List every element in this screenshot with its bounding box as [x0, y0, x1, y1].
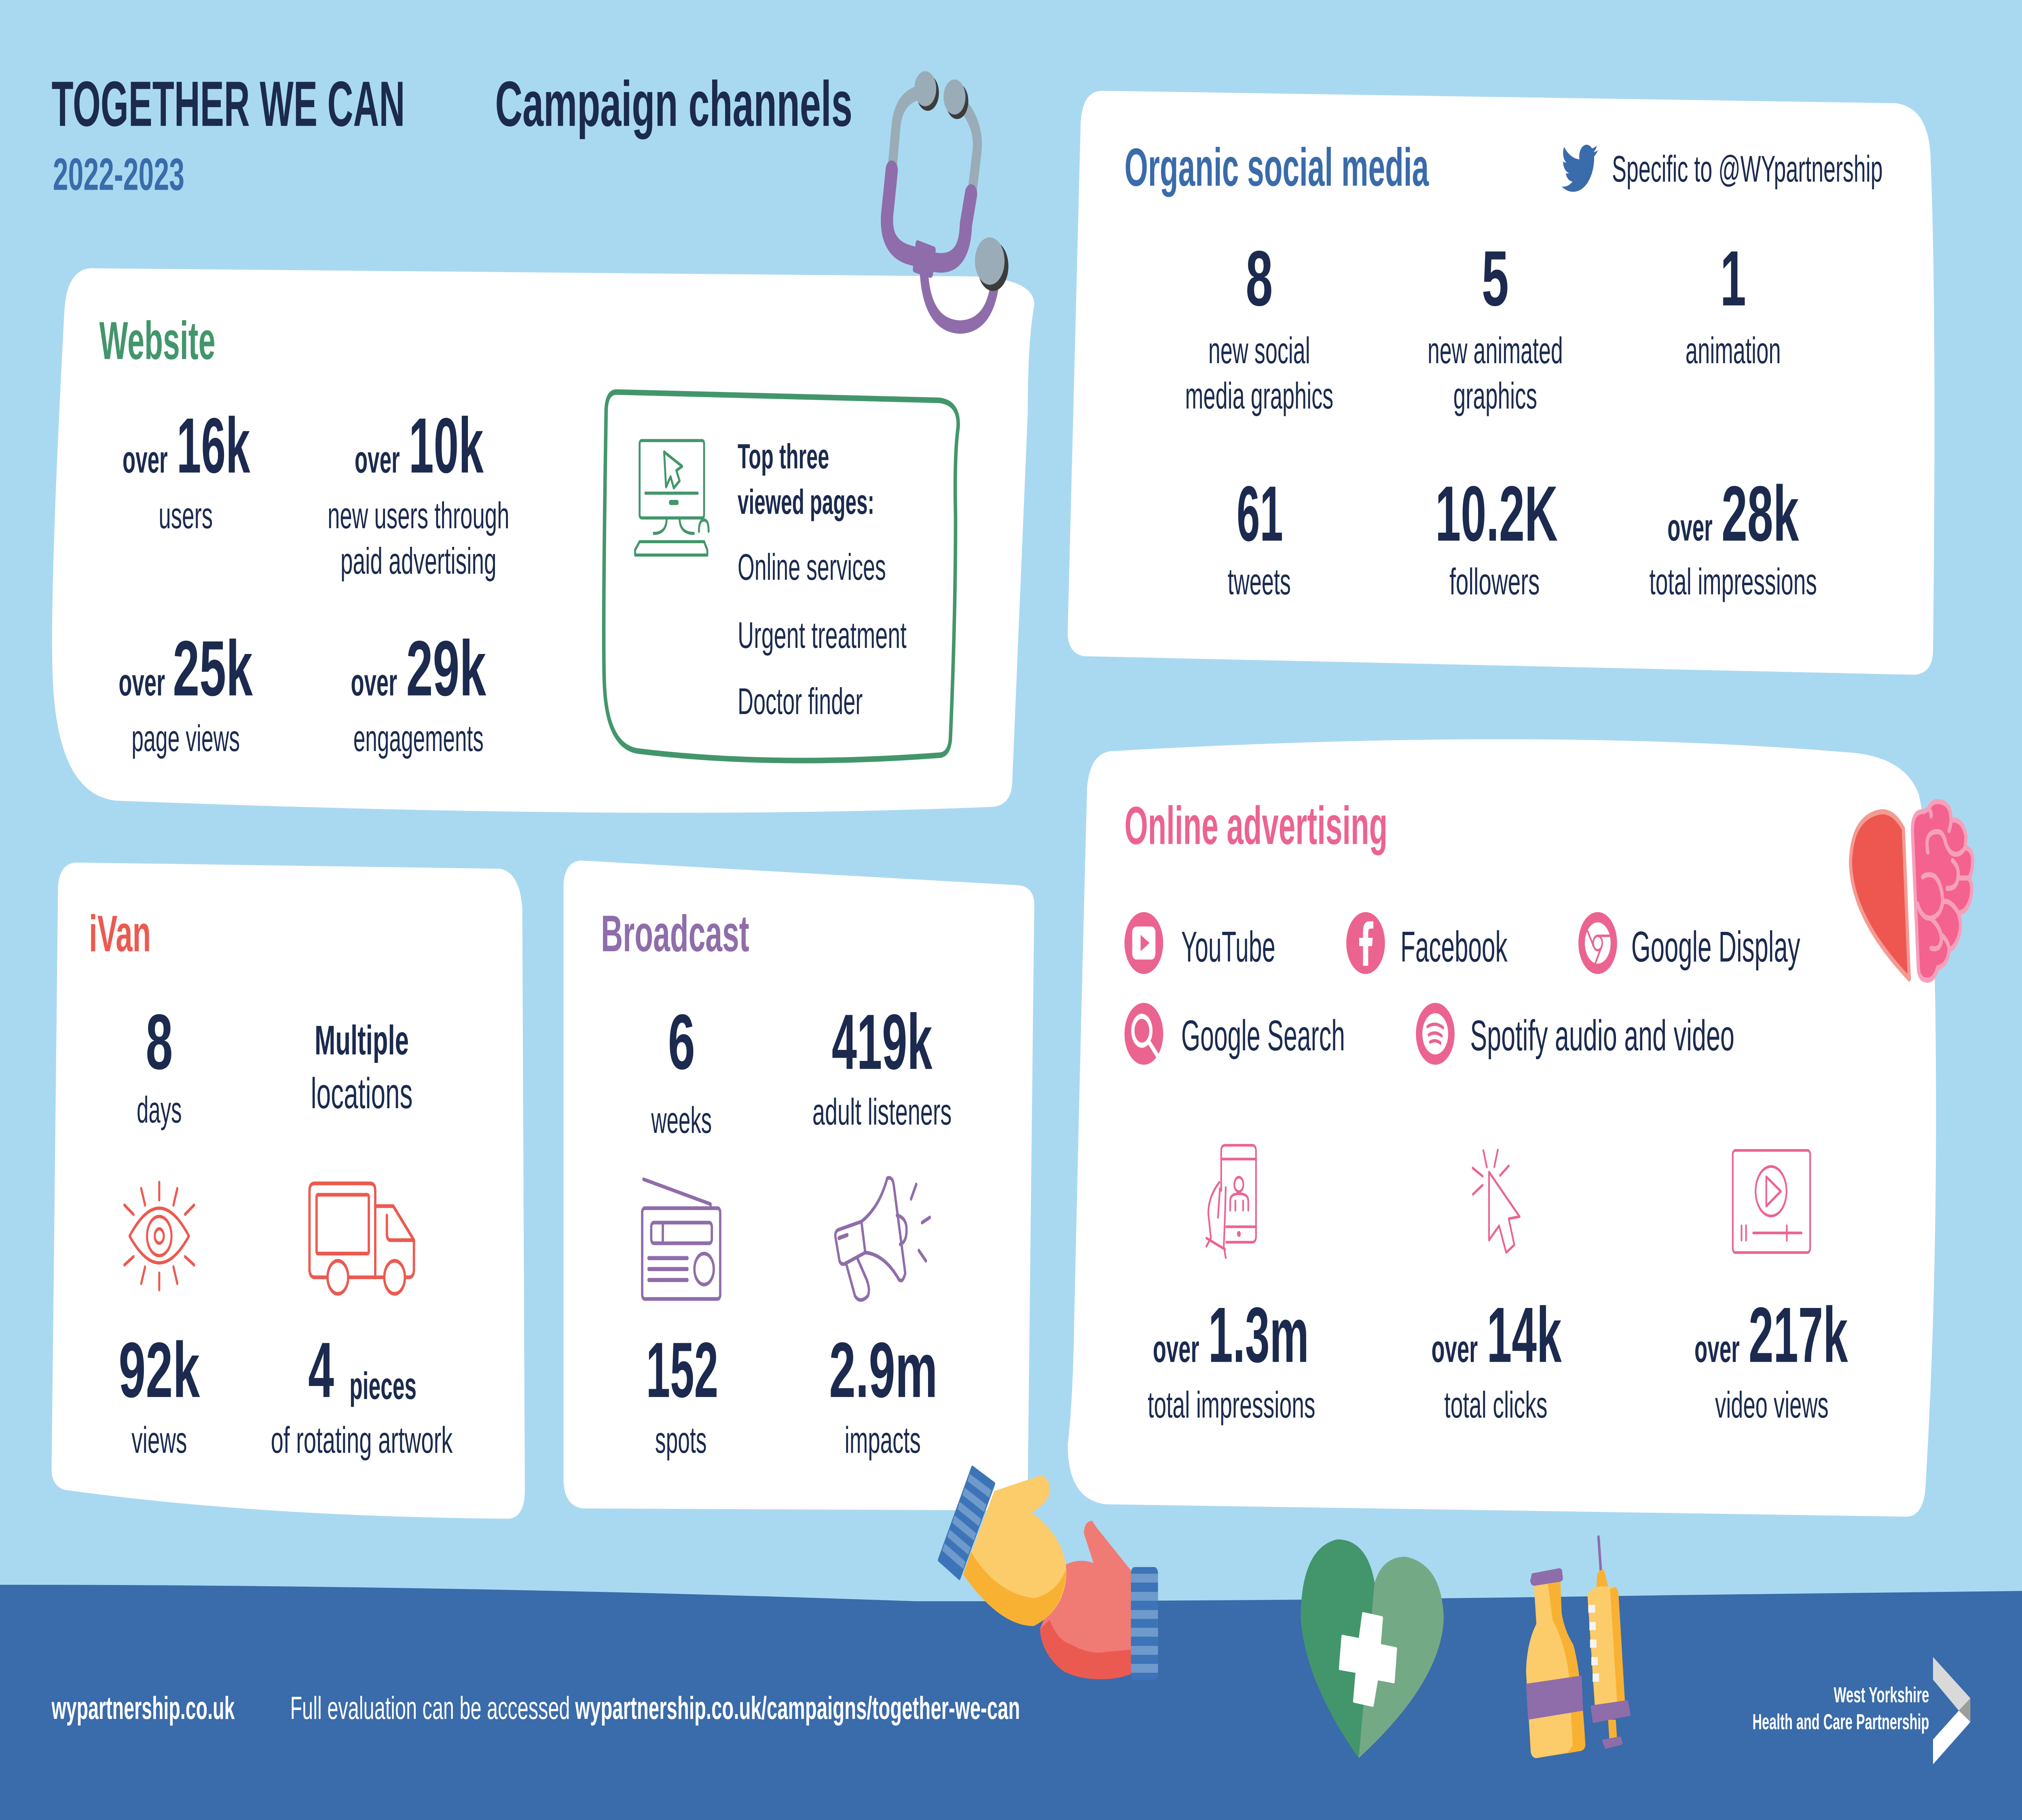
text: evaluation note: Full evaluation can be accessed — [290, 1690, 570, 1726]
stat: animation — [1686, 235, 1781, 371]
stat: listeners — [812, 999, 952, 1133]
stat: page views: over — [118, 661, 165, 704]
panel: organic social media — [1068, 91, 1935, 675]
heading: online advertising: Online advertising — [1125, 796, 1387, 856]
icon: twitter bird — [1562, 145, 1598, 192]
heading: broadcast: Broadcast — [601, 905, 749, 963]
text: twitter handle: Specific to @WYpartnership — [1612, 148, 1883, 190]
text: top three list: viewed pages: — [738, 483, 874, 522]
stat: social graphics: 8 — [1246, 235, 1273, 322]
stat: tweets: tweets — [1228, 561, 1291, 603]
stat: impacts — [829, 1327, 937, 1461]
stat: views: views — [131, 1420, 187, 1461]
channel: Google Display: Google Display — [1631, 922, 1800, 971]
icon: computer — [635, 440, 709, 555]
channel: YouTube — [1125, 912, 1275, 974]
stat: animation: animation — [1686, 330, 1781, 371]
stat: locations: Multiple — [315, 1018, 409, 1064]
stat: days: 8 — [146, 999, 173, 1086]
panel: broadcast — [563, 861, 1034, 1511]
stat: spots: 152 — [646, 1327, 718, 1414]
stat: new users — [328, 402, 510, 582]
stat: total clicks: over — [1432, 1327, 1478, 1370]
link: website: wypartnership.co.uk — [51, 1690, 235, 1726]
channel: Google Search: Google Search — [1181, 1011, 1345, 1060]
stat: listeners: 419k — [832, 999, 933, 1086]
illustration: syringe — [1587, 1537, 1630, 1748]
icon: truck — [309, 1183, 414, 1294]
stat: locations: locations — [311, 1069, 412, 1117]
stat: page views: page views — [131, 718, 240, 760]
channel: Spotify: Spotify audio and video — [1470, 1011, 1734, 1060]
stat: animated graphics: graphics — [1453, 376, 1537, 417]
panel: website — [52, 268, 1034, 813]
stat: social graphics: new social — [1208, 330, 1310, 371]
footer band — [0, 1585, 2022, 1820]
channel: Facebook: Facebook — [1400, 922, 1508, 971]
stat: engagements — [351, 625, 486, 760]
icon: video player — [1733, 1150, 1810, 1253]
stat: social graphics: media graphics — [1185, 376, 1333, 417]
stat: followers — [1435, 470, 1558, 603]
stat: engagements: engagements — [353, 718, 484, 760]
stat: weeks — [651, 999, 712, 1141]
footer text — [51, 1690, 1020, 1726]
stat: views — [118, 1327, 200, 1461]
stat: animation: 1 — [1720, 235, 1746, 322]
text: top three list: Doctor finder — [738, 681, 863, 722]
logo: West Yorkshire Health and Care Partnership: West Yorkshire — [1834, 1683, 1929, 1707]
channel: Google Search — [1125, 1003, 1345, 1065]
illustration: stethoscope — [887, 71, 1009, 327]
callout: top three pages — [604, 392, 958, 760]
stat: users: over — [123, 438, 168, 481]
stat: new users: 10k — [409, 402, 484, 489]
stat: impacts: 2.9m — [829, 1327, 937, 1414]
stat: engagements: 29k — [406, 625, 486, 712]
channel: YouTube: YouTube — [1181, 922, 1275, 971]
stat: total impressions: total impressions — [1148, 1385, 1316, 1426]
stat: pieces — [271, 1327, 453, 1461]
stat: tweets — [1228, 470, 1291, 603]
panel: iVan — [52, 863, 525, 1519]
illustration: vaccine bottle — [1526, 1568, 1585, 1758]
stat: spots — [646, 1327, 718, 1461]
heading: organic social media: Organic social media — [1125, 138, 1429, 197]
illustration: hands — [939, 1467, 1158, 1680]
stat: impacts: impacts — [845, 1420, 921, 1461]
year: 2022-2023 — [53, 148, 184, 199]
stat: animated graphics: new animated — [1428, 330, 1563, 371]
stat: total clicks: 14k — [1487, 1291, 1562, 1379]
stat: page views: 25k — [173, 625, 253, 712]
stat: users: users — [159, 495, 213, 537]
stat: users: 16k — [177, 402, 250, 489]
stat: social graphics — [1185, 235, 1333, 417]
icon: eye — [125, 1182, 194, 1290]
text: evaluation note: wypartnership.co.uk/campaigns/together-we-can — [575, 1690, 1020, 1726]
illustration: heart and brain — [1851, 802, 1973, 980]
logo: West Yorkshire Health and Care Partnership — [1753, 1657, 1970, 1764]
stat: spots: spots — [655, 1420, 706, 1461]
stat: new users: over — [355, 438, 400, 481]
stat: days — [137, 999, 182, 1131]
channel: Facebook — [1346, 912, 1508, 974]
illustration: green heart with cross — [1301, 1539, 1444, 1758]
stat: engagements: over — [351, 661, 397, 704]
stat: views: 92k — [118, 1327, 200, 1414]
stat: tweets: 61 — [1237, 470, 1283, 558]
text: top three list: Top three — [738, 437, 829, 476]
stat: listeners: adult listeners — [812, 1092, 952, 1133]
stat: followers: followers — [1449, 561, 1540, 603]
stat: weeks: weeks — [651, 1100, 712, 1141]
stat: new users: new users through — [328, 495, 510, 537]
stat: days: days — [137, 1090, 182, 1131]
stat: weeks: 6 — [668, 999, 695, 1086]
panel: online advertising — [1068, 739, 1936, 1517]
stat: total impressions: over — [1153, 1327, 1199, 1370]
stat: video views: 217k — [1749, 1291, 1848, 1379]
stat: page views — [118, 625, 253, 760]
stat: pieces: 4 — [308, 1327, 334, 1414]
icon: phone in hand — [1206, 1145, 1256, 1258]
stat: video views: video views — [1715, 1385, 1829, 1426]
header — [52, 68, 852, 199]
stat: total clicks — [1432, 1291, 1562, 1426]
stat: video views: over — [1694, 1327, 1740, 1370]
stat: video views — [1694, 1291, 1848, 1426]
stat: total impressions: 28k — [1722, 470, 1799, 558]
stat: pieces: pieces — [349, 1365, 417, 1407]
logo: West Yorkshire Health and Care Partnership: Health and Care Partnership — [1753, 1710, 1929, 1734]
stat: users — [123, 402, 250, 537]
heading: website: Website — [99, 311, 216, 371]
stat: total impressions: total impressions — [1649, 561, 1817, 603]
title: TOGETHER WE CAN — [52, 68, 405, 140]
subtitle: Campaign channels — [495, 68, 852, 140]
stat: animated graphics: 5 — [1482, 235, 1509, 322]
stat: locations — [311, 1018, 412, 1117]
stat: total clicks: total clicks — [1444, 1385, 1548, 1426]
channel: Google Display — [1578, 912, 1800, 974]
stat: total impressions: over — [1667, 506, 1713, 549]
stat: pieces: of rotating artwork — [271, 1420, 453, 1461]
channel: Spotify — [1416, 1003, 1734, 1065]
icon: cursor click — [1473, 1150, 1520, 1253]
text: top three list — [738, 437, 907, 722]
stat: new users: paid advertising — [341, 541, 497, 582]
stat: total impressions — [1148, 1291, 1316, 1426]
stat: animated graphics — [1428, 235, 1563, 417]
icon: radio — [642, 1179, 720, 1299]
heading: iVan: iVan — [89, 905, 151, 963]
stat: total impressions — [1649, 470, 1817, 603]
text: top three list: Urgent treatment — [738, 615, 907, 656]
stat: total impressions: 1.3m — [1208, 1291, 1309, 1379]
stat: followers: 10.2K — [1435, 470, 1558, 558]
text: evaluation note — [290, 1690, 1020, 1726]
text: top three list: Online services — [738, 547, 886, 588]
icon: megaphone — [835, 1178, 930, 1300]
